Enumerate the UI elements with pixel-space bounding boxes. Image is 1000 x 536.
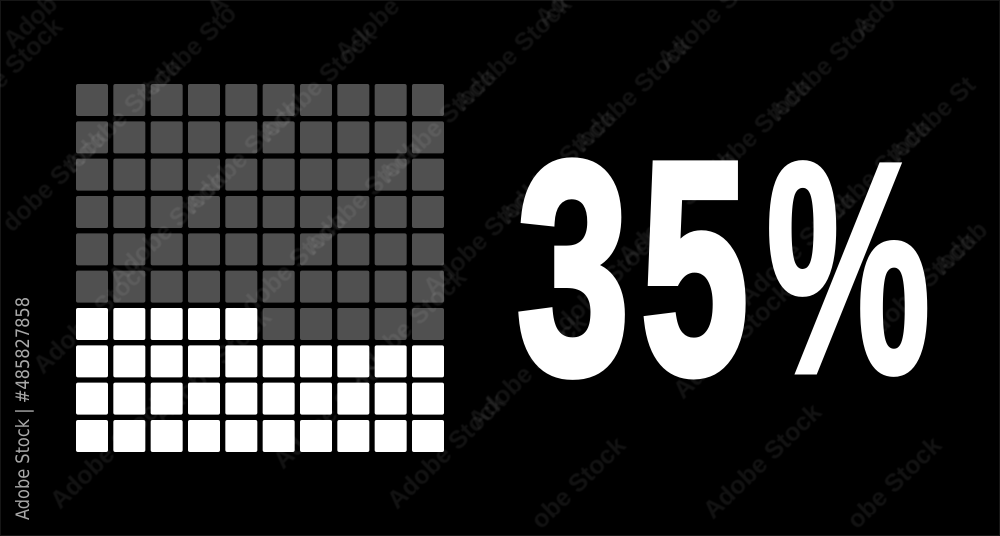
waffle chart: 35 of 100 squares filled: [76, 84, 444, 452]
watermark pattern: Adobe Stock: [58, 52, 187, 178]
watermark pattern: Adobe Stock: [28, 253, 157, 379]
watermark pattern: Adobe Stock: [568, 31, 697, 157]
watermark pattern: Adobe Stock: [268, 348, 397, 474]
watermark pattern: Adobe Stock: [733, 185, 862, 311]
watermark pattern: Adobe Stock: [223, 206, 352, 332]
watermark pattern: Adobe Stock: [343, 263, 472, 389]
watermark pattern: Adobe Stock: [373, 62, 502, 188]
watermark pattern: Adobe Sto: [133, 0, 242, 106]
big percentage figure: 35%: %: [766, 100, 931, 436]
watermark pattern: obe Stock: [842, 431, 947, 534]
watermark pattern: Adobe Stock: [853, 226, 982, 352]
watermark pattern: Adobe Stock: [698, 398, 827, 524]
watermark pattern: Adobe Stock: [668, 278, 797, 404]
watermark pattern: Adobe Stock: [463, 308, 592, 434]
watermark pattern: Adob: [928, 216, 993, 280]
watermark pattern: Adobe Stock: [103, 165, 232, 291]
watermark pattern: Adobe Stock: [688, 72, 817, 198]
watermark pattern: Adobe Stock: [148, 303, 277, 429]
big percentage figure: 35%: [517, 99, 931, 437]
stock ID caption (vertical): Adobe Stock | #485827858: [12, 297, 34, 520]
watermark pattern: Adobe St: [883, 70, 982, 167]
gray unfilled squares (65): [76, 84, 444, 340]
watermark pattern: Adobe Stock: [382, 388, 511, 514]
watermark pattern: Adobe Stock: [298, 134, 427, 260]
watermark pattern: Adobe Stock: [808, 113, 937, 239]
watermark pattern: Adobe Stoc: [763, 10, 882, 126]
watermark pattern: Adobe Stock: [418, 175, 547, 301]
watermark pattern: dobe Stock: [0, 124, 113, 237]
watermark pattern: obe Stock: [526, 431, 631, 534]
watermark pattern: Adobe Stock: [178, 93, 307, 219]
watermark pattern: Adobe Stock: [538, 223, 667, 349]
watermark pattern: Adobe Stock: [253, 21, 382, 147]
white filled squares (35): [76, 308, 444, 452]
watermark pattern: Adobe Stock: [613, 144, 742, 270]
watermark pattern: Adobe Stock: [45, 388, 174, 514]
big percentage figure: 35%: 3: [517, 101, 629, 437]
big percentage figure: 35%: 5: [641, 99, 748, 436]
watermark pattern: Adobe Stock: [493, 103, 622, 229]
